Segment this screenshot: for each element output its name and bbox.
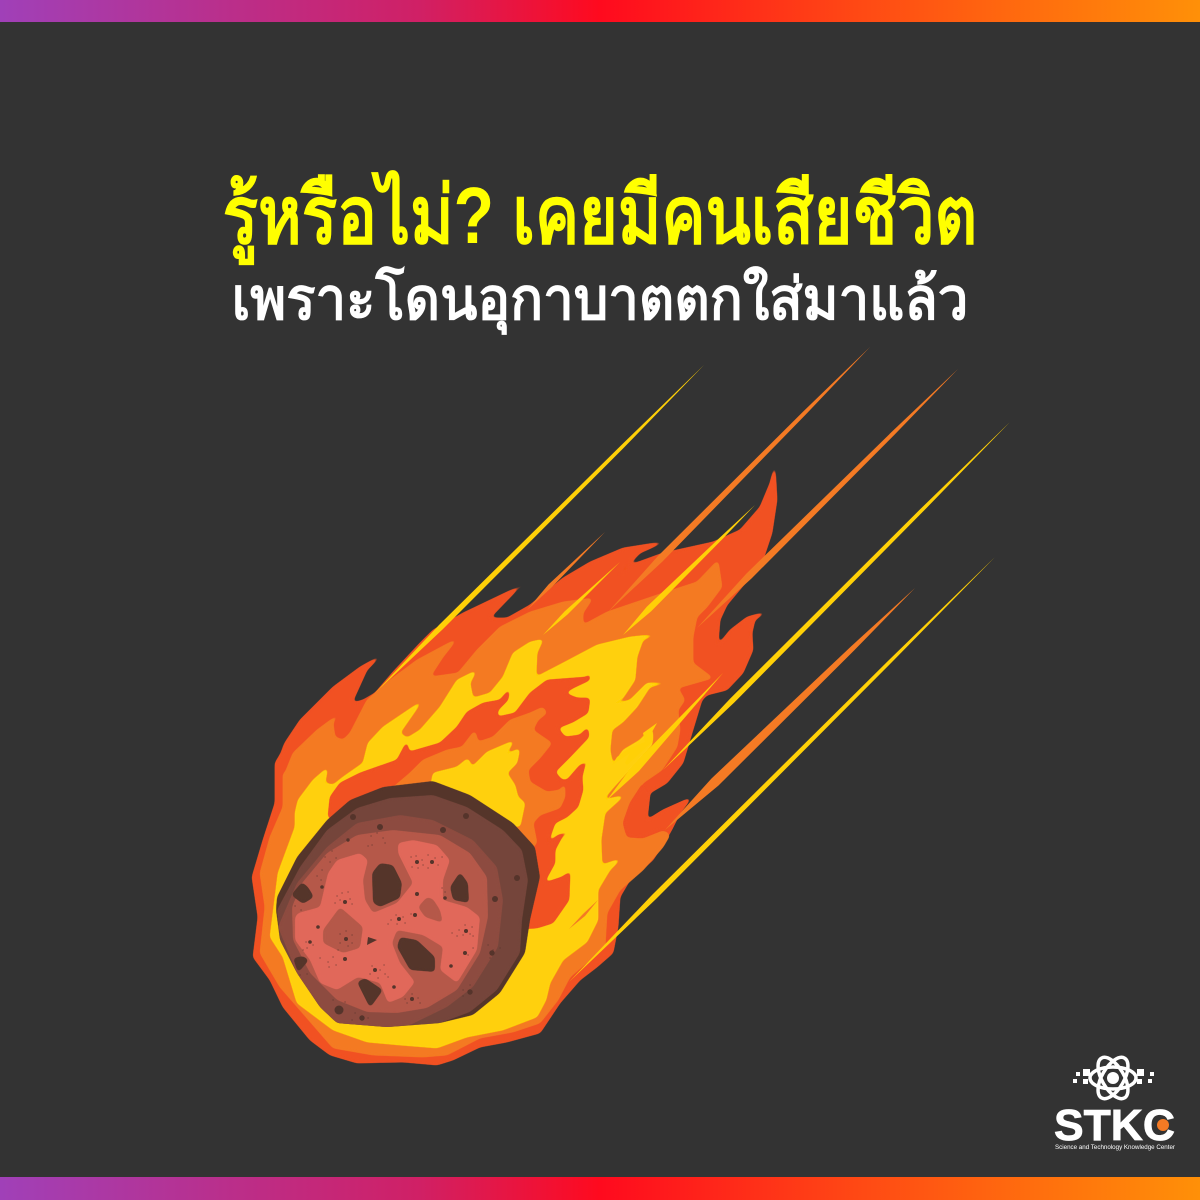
streak: thin orange on yellow	[569, 900, 598, 929]
streak: small orange	[527, 532, 605, 610]
top gradient bar	[0, 0, 1200, 22]
rock: pink core	[295, 840, 480, 1003]
flame: small yellow wisp	[612, 723, 657, 765]
rock: craters	[291, 863, 469, 1008]
title: white line: เพราะโดนอุกาบาตตกใส่มาแล้ว	[232, 267, 968, 332]
streak: orange lower	[665, 588, 915, 830]
streak: yellow centre	[607, 673, 723, 800]
logo: STKC	[1054, 1053, 1176, 1151]
flame: inner red tongues	[328, 672, 593, 930]
meteor illustration	[252, 347, 1010, 1065]
logo orange dot	[1157, 1119, 1169, 1131]
logo icon: atom	[1090, 1053, 1136, 1103]
rock: speckles	[295, 833, 500, 1020]
rock: second layer	[277, 795, 528, 1027]
flame: inner orange	[390, 707, 565, 850]
streak: orange	[697, 369, 958, 628]
rock: dots	[308, 813, 520, 1021]
rock: third layer	[278, 815, 503, 1027]
streak: yellow short	[623, 505, 755, 635]
streak: orange	[608, 347, 870, 612]
streak: small yellow	[543, 562, 620, 635]
flame: orange layer	[260, 560, 722, 1057]
meteor rock	[276, 781, 540, 1027]
flame: yellow layer	[270, 634, 673, 1048]
logo caption: Science and Technology Knowledge Center	[1055, 1144, 1176, 1151]
red hook highlight	[623, 783, 692, 838]
flame: inner yellow	[430, 740, 525, 827]
bottom gradient bar	[0, 1177, 1200, 1200]
streak: yellow lower	[569, 557, 995, 982]
rock: fourth layer	[292, 830, 488, 1013]
rock: soft patches	[323, 897, 443, 953]
streak: yellow long left	[375, 365, 704, 693]
title: yellow line: รู้หรือไม่? เคยมีคนเสียชีวิต	[223, 171, 977, 260]
streak: yellow long	[663, 422, 1010, 770]
rock: dark rim	[276, 781, 540, 1027]
logo icon: pixel squares	[1073, 1069, 1154, 1084]
logo wordmark: STKC	[1054, 1101, 1175, 1150]
flame: outer red layer	[252, 463, 777, 1065]
